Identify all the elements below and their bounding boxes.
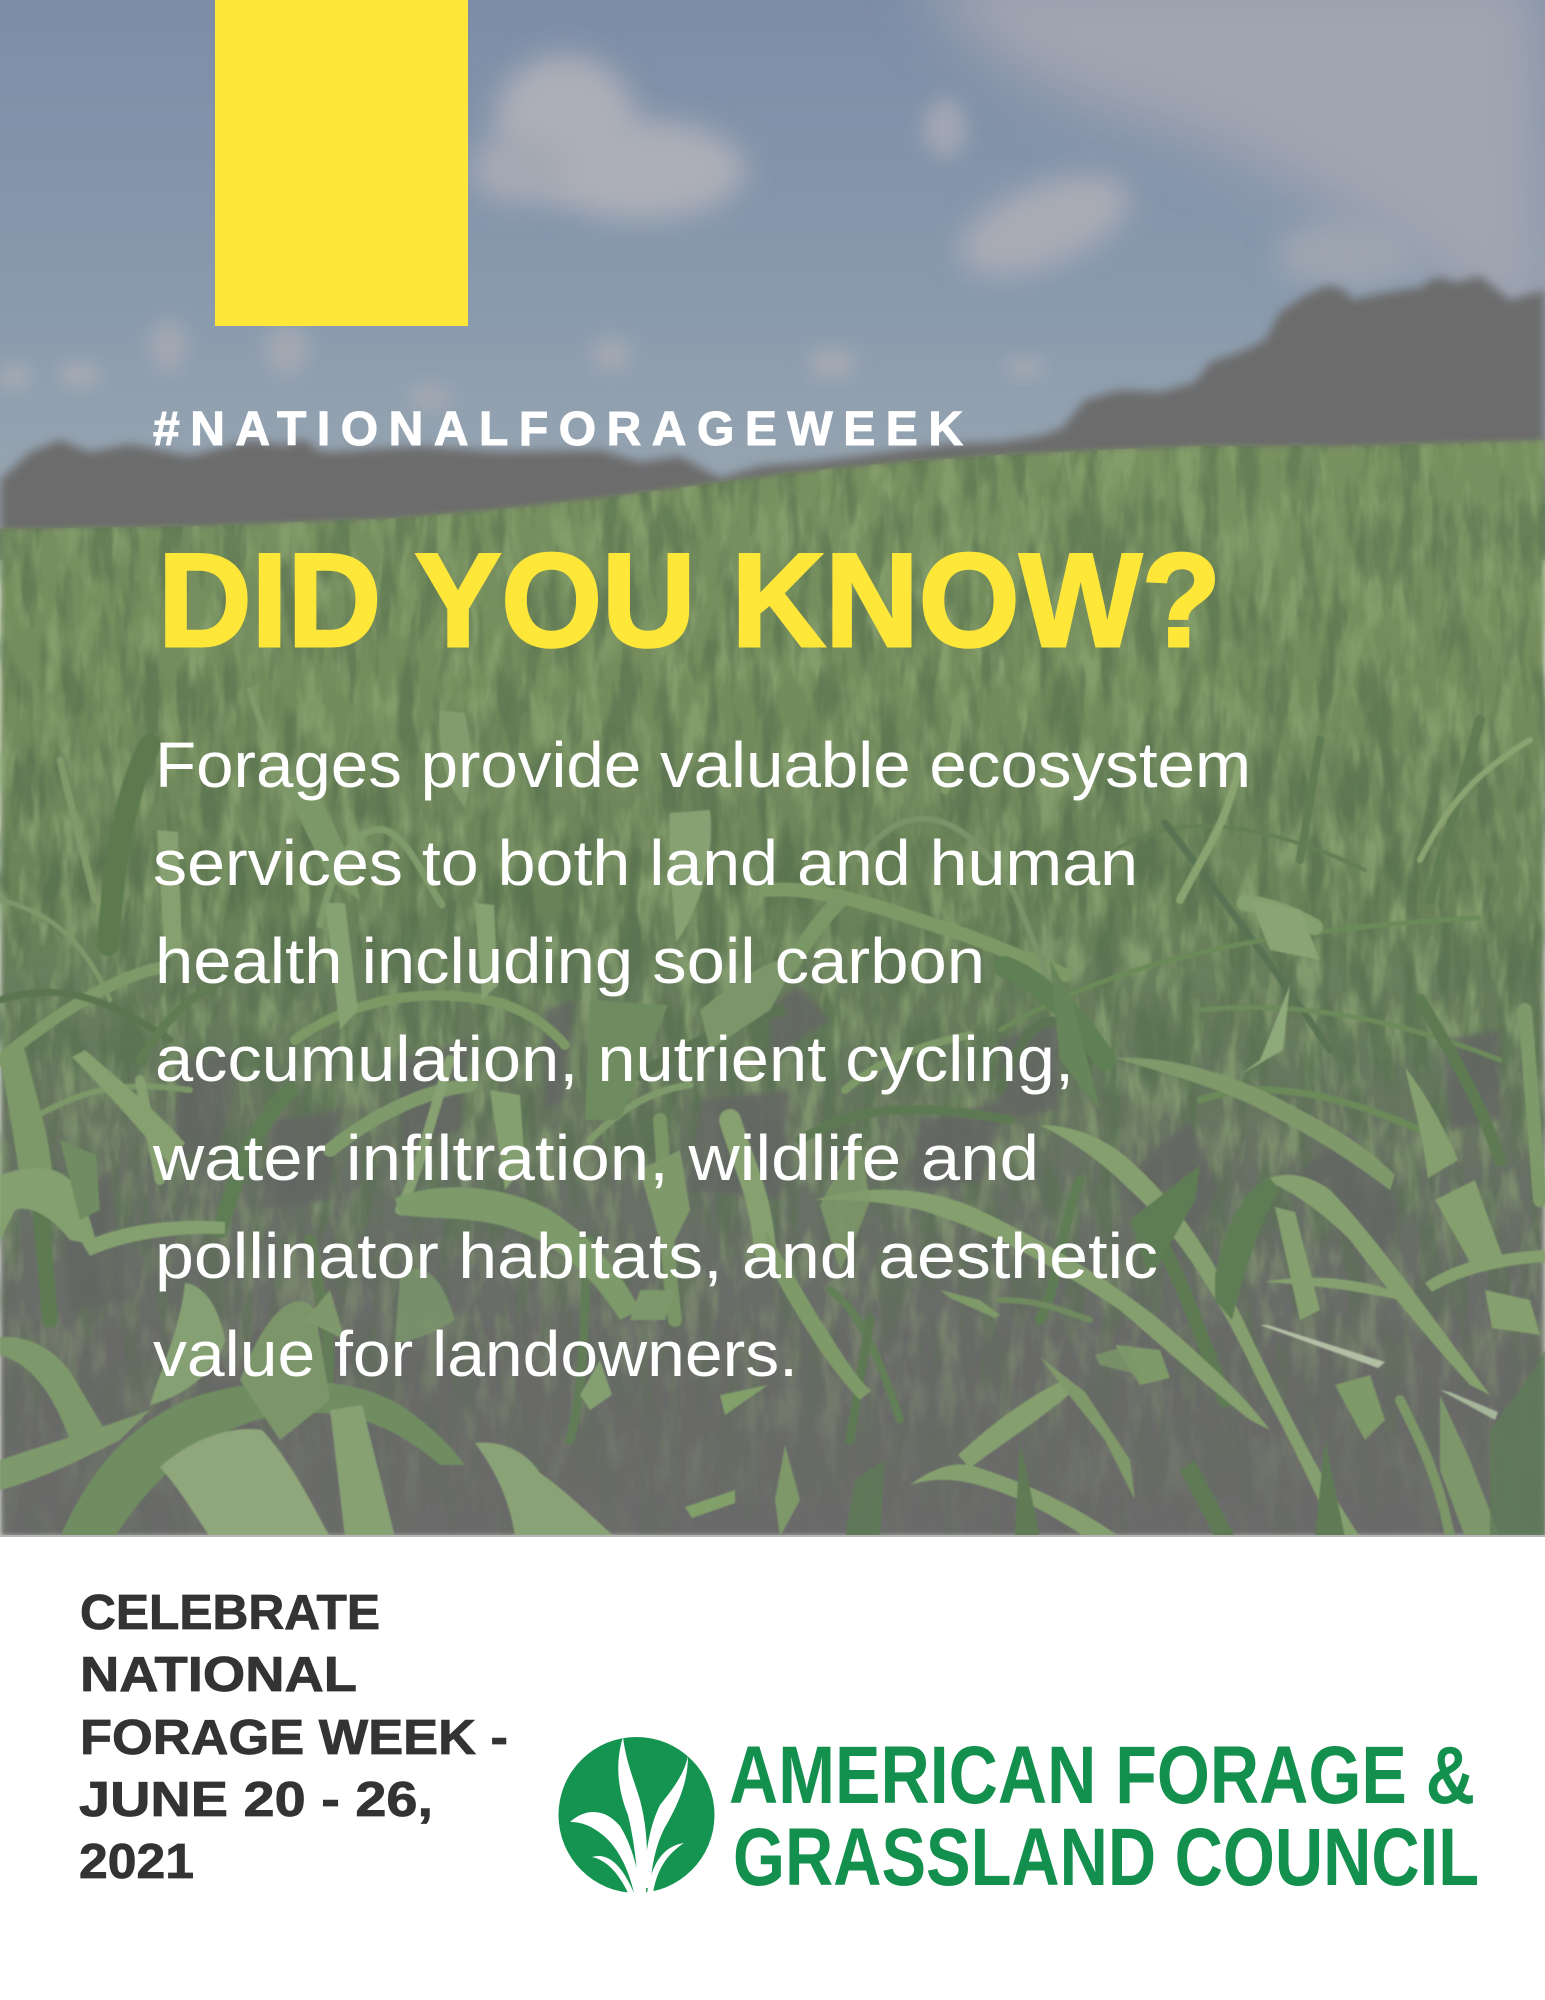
grass base <box>0 440 1545 1537</box>
body paragraph: water infiltration, wildlife and <box>152 1122 1039 1194</box>
tree line <box>0 276 1545 560</box>
celebrate text <box>79 1586 508 1889</box>
white strip edge <box>0 1535 1545 1537</box>
yellow rectangle <box>215 0 468 326</box>
body paragraph <box>152 729 1251 1390</box>
celebrate text: JUNE 20 - 26, <box>79 1773 433 1827</box>
body paragraph: health including soil carbon <box>155 925 985 997</box>
body paragraph: services to both land and human <box>153 827 1138 899</box>
celebrate text: NATIONAL <box>80 1648 357 1702</box>
body paragraph: accumulation, nutrient cycling, <box>155 1023 1074 1095</box>
celebrate text: 2021 <box>79 1835 194 1889</box>
logo <box>558 1730 1479 1903</box>
logo wordmark <box>729 1730 1479 1903</box>
heading: did you know: DID YOU KNOW? <box>158 527 1221 675</box>
background photo: field and sky <box>0 0 1545 1537</box>
body paragraph: value for landowners. <box>153 1318 798 1390</box>
mid-ground blades <box>0 690 1540 1537</box>
dark gaps between blades <box>60 985 1500 1310</box>
foreground blades right <box>765 1058 1545 1537</box>
sky <box>0 0 1545 560</box>
foreground blades left <box>0 1040 768 1537</box>
hashtag line: #NATIONALFORAGEWEEK <box>153 403 963 456</box>
celebrate text: CELEBRATE <box>80 1586 380 1640</box>
celebrate text: FORAGE WEEK - <box>80 1711 508 1765</box>
grass texture <box>0 440 1545 1537</box>
icon: grass circle <box>558 1737 714 1893</box>
body paragraph: Forages provide valuable ecosystem <box>155 729 1251 801</box>
footer panel <box>0 1537 1545 2000</box>
body paragraph: pollinator habitats, and aesthetic <box>155 1220 1158 1292</box>
